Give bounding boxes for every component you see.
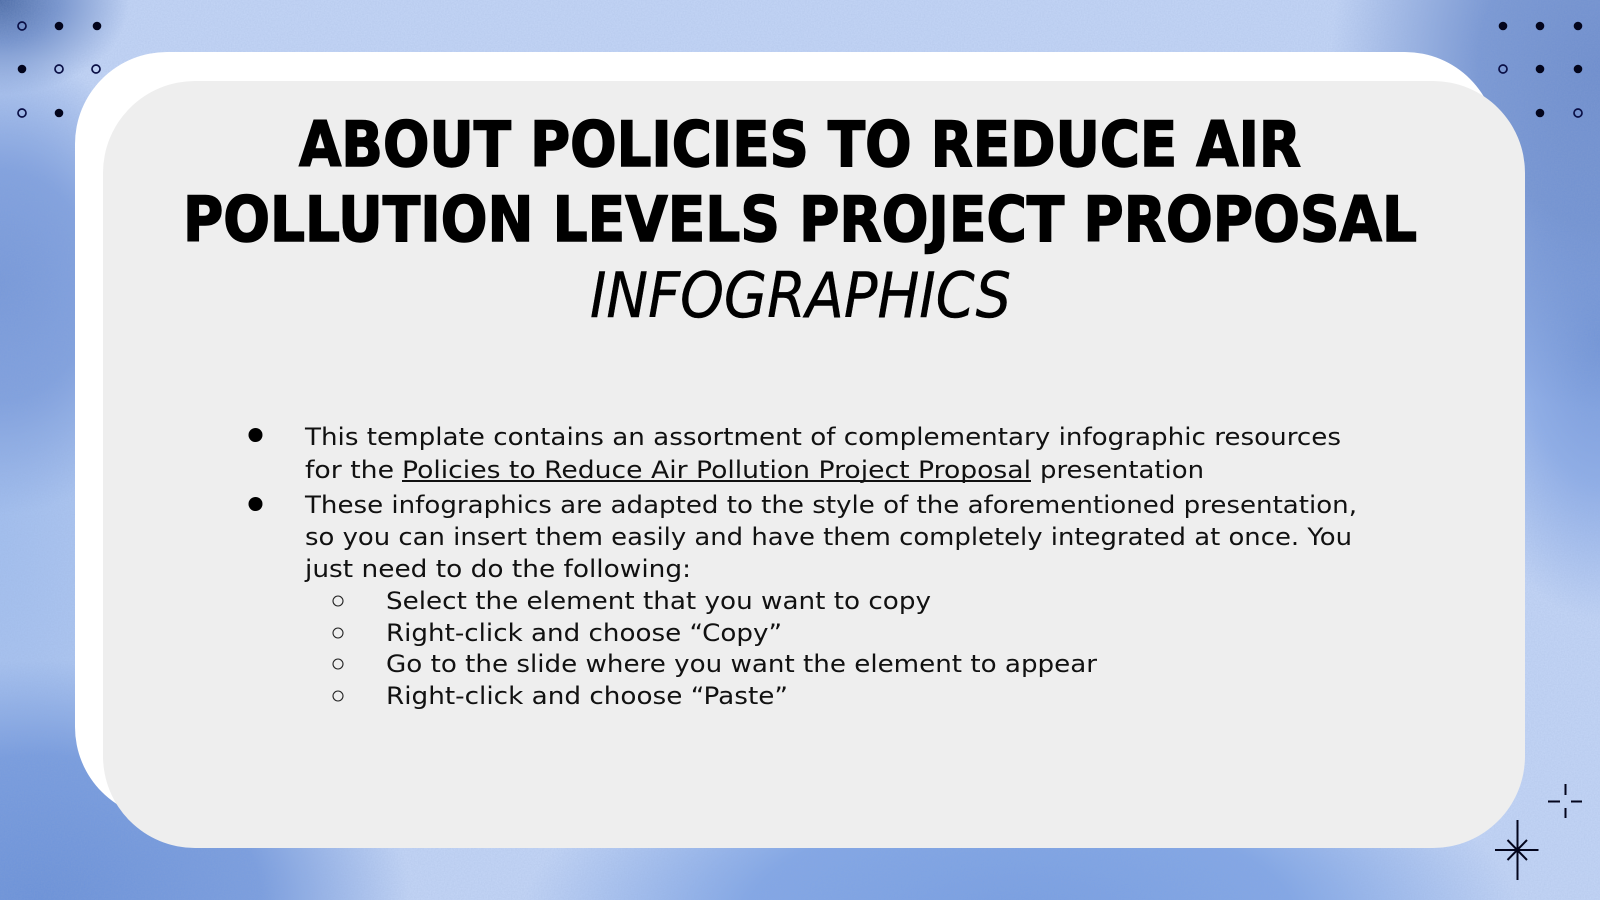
title: POLLUTION LEVELS PROJECT PROPOSAL <box>183 183 1417 256</box>
sub-list text: Select the element that you want to copy <box>386 587 931 615</box>
sub-list text: Right-click and choose “Paste” <box>386 682 788 710</box>
bullet 2 text: just need to do the following: <box>304 555 691 583</box>
panel: white back card <box>75 52 1497 819</box>
bullet 1 text: Policies to Reduce Air Pollution Project Proposal <box>402 456 1031 484</box>
decoration: dot grid top left <box>18 22 101 117</box>
sub-list markers <box>333 596 343 701</box>
decoration: dot grid top right <box>1499 22 1582 117</box>
bullet 2 text <box>304 491 1357 583</box>
bullet 2 <box>248 497 262 511</box>
bullet 2 text: These infographics are adapted to the style of the aforementioned presentation, <box>304 491 1357 519</box>
title <box>183 108 1417 332</box>
text block: instructions list <box>248 423 1357 710</box>
sub-list text: Go to the slide where you want the element to appear <box>386 650 1097 678</box>
bullet 2 text: so you can insert them easily and have them completely integrated at once. You <box>305 523 1352 551</box>
bullet 1 <box>248 428 262 442</box>
title: ABOUT POLICIES TO REDUCE AIR <box>299 108 1301 181</box>
bullet 1 text: for the <box>305 456 394 484</box>
icon: small sparkle <box>1548 784 1582 818</box>
title: INFOGRAPHICS <box>590 259 1011 332</box>
sub-list text <box>386 587 1097 710</box>
bullet 1 text <box>304 423 1341 484</box>
sub-list text: Right-click and choose “Copy” <box>386 619 782 647</box>
bullet 1 text: This template contains an assortment of complementary infographic resources <box>304 423 1341 451</box>
panel: grey front card <box>103 81 1525 848</box>
icon: large sparkle <box>1495 820 1538 880</box>
bullet 1 text: presentation <box>1040 456 1204 484</box>
